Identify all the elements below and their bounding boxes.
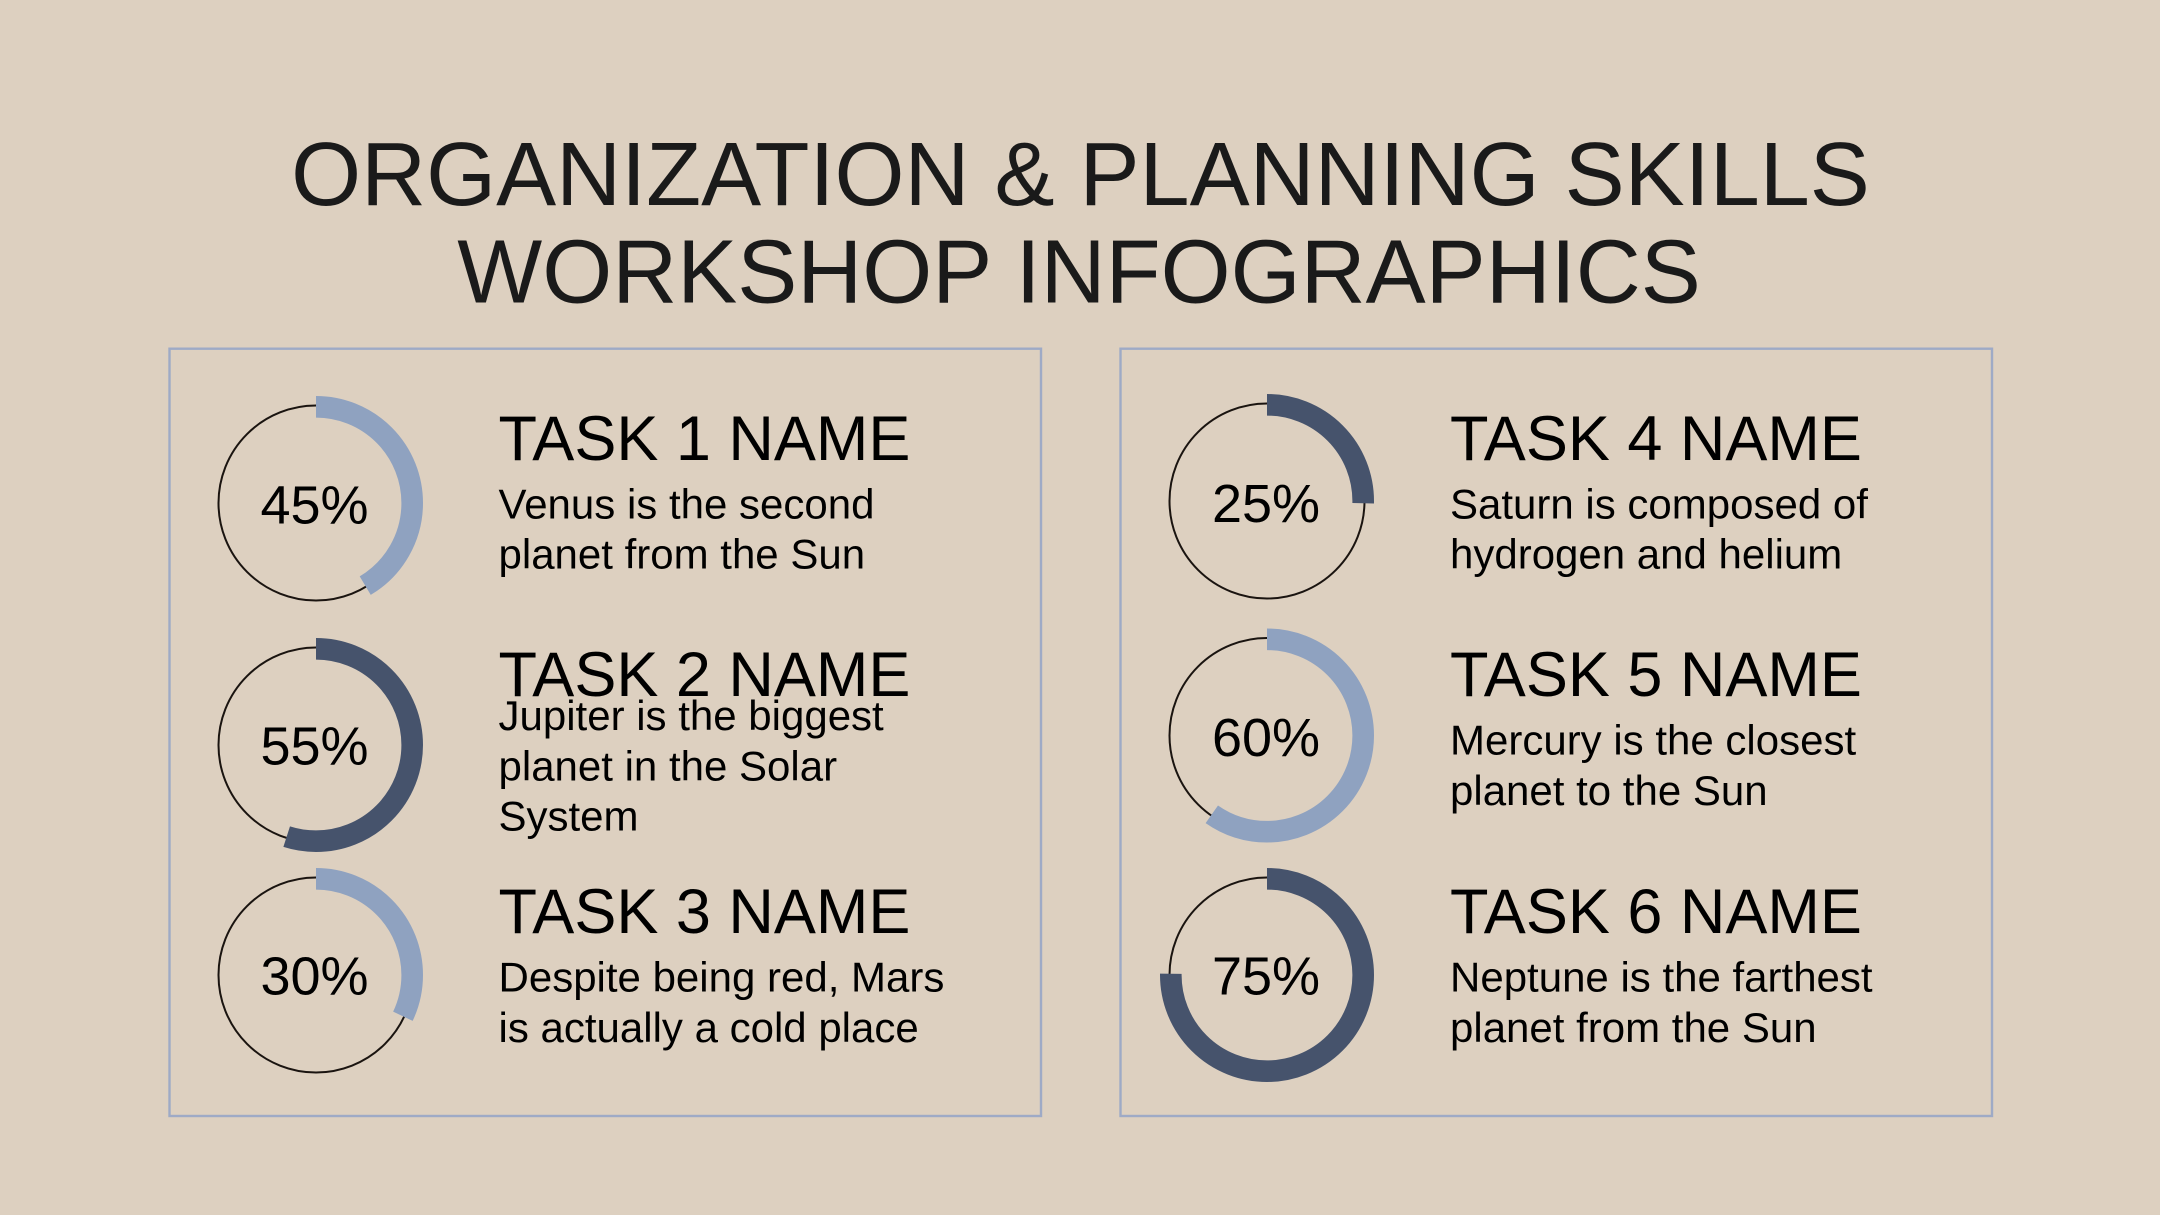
task 3: [218, 877, 944, 1072]
donut chart: 30%: [218, 878, 414, 1072]
task 2 description: Jupiter is the biggest: [498, 692, 884, 739]
task 5 description: Mercury is the closest: [1450, 716, 1856, 763]
task 6 heading: TASK 6 NAME: [1450, 877, 1862, 947]
panel: right tasks: [1120, 349, 1992, 1116]
task 3 description: Despite being red, Mars: [498, 954, 944, 1000]
donut chart: 75%: 75%: [1212, 946, 1320, 1006]
task 1 description: planet from the Sun: [498, 531, 865, 578]
title: WORKSHOP INFOGRAPHICS: [457, 222, 1701, 322]
task 4 heading: TASK 4 NAME: [1450, 404, 1862, 474]
donut chart: 55%: 55%: [260, 716, 369, 776]
donut chart: 30%: 30%: [260, 946, 369, 1006]
task 2: [218, 640, 910, 842]
title: ORGANIZATION & PLANNING SKILLS: [291, 125, 1870, 225]
title: [291, 125, 1870, 322]
task 4 description: Saturn is composed of: [1450, 480, 1868, 527]
donut chart: 55%: [218, 648, 414, 842]
task 6 description: planet from the Sun: [1450, 1004, 1817, 1051]
task 2 heading: TASK 2 NAME: [498, 640, 910, 710]
task 2 description: System: [498, 793, 639, 840]
donut chart: 25%: [1170, 404, 1364, 598]
task 2 description: planet in the Solar: [498, 742, 837, 789]
panel: left tasks: [170, 349, 1041, 1116]
donut chart: 45%: 45%: [260, 476, 369, 536]
task 1 heading: TASK 1 NAME: [498, 404, 910, 474]
task 4: [1170, 404, 1868, 598]
task 3 description: is actually a cold place: [498, 1004, 919, 1051]
task 1 description: Venus is the second: [498, 480, 874, 527]
task 6: [1170, 877, 1873, 1072]
donut chart: 25%: 25%: [1212, 474, 1320, 534]
task 5 heading: TASK 5 NAME: [1450, 640, 1862, 710]
task 5: [1170, 638, 1862, 833]
task 4 description: hydrogen and helium: [1450, 531, 1842, 578]
task 6 description: Neptune is the farthest: [1450, 954, 1873, 1000]
task 5 description: planet to the Sun: [1450, 767, 1768, 814]
donut chart: 60%: [1170, 638, 1364, 833]
task 3 heading: TASK 3 NAME: [498, 877, 910, 947]
task 1: [218, 404, 910, 600]
donut chart: 60%: 60%: [1212, 708, 1320, 768]
donut chart: 75%: [1170, 878, 1364, 1072]
donut chart: 45%: [218, 406, 414, 600]
